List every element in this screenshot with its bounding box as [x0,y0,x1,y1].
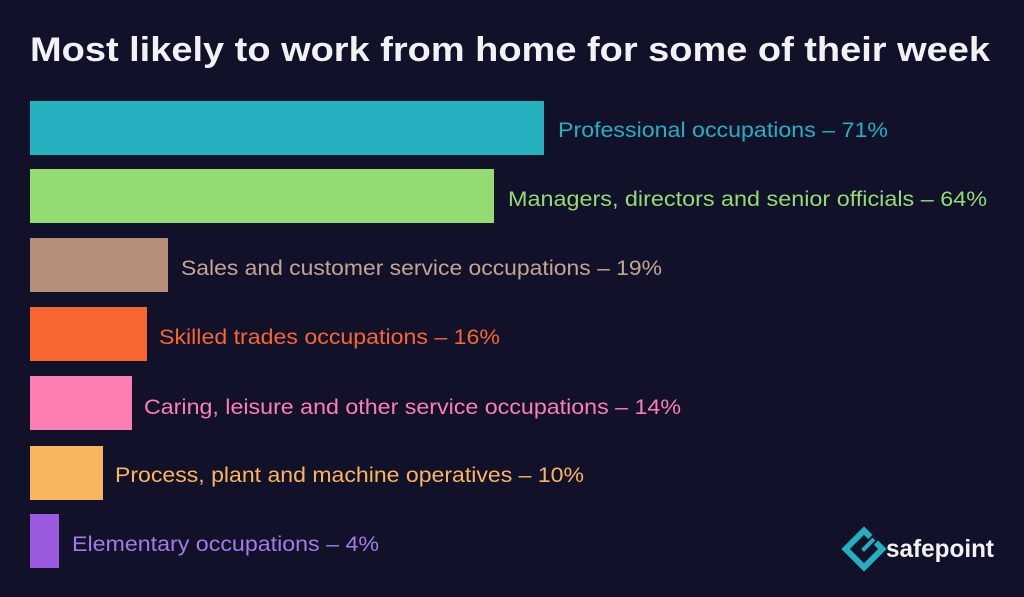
bar: process [30,446,584,500]
icon: diamond [846,528,885,567]
bar: sales [30,238,662,292]
bar: caring [30,376,681,430]
bar: managers [30,169,987,223]
bar: professional [30,101,888,155]
bar: caring: Caring, leisure and other service occupations – 14% [144,396,681,419]
logo: safepoint [886,535,995,563]
bar: elementary [30,514,379,568]
logo [846,528,995,567]
title: Most likely to work from home for some of their week [30,31,990,69]
bar: elementary: Elementary occupations – 4% [72,533,379,556]
bar: skilled trades: Skilled trades occupations – 16% [159,326,500,349]
bar: managers: Managers, directors and senior officials – 64% [508,188,987,211]
bar: process: Process, plant and machine operatives – 10% [115,464,584,487]
bar: sales: Sales and customer service occupations – 19% [181,257,662,280]
bar: skilled trades [30,307,500,361]
bar: professional: Professional occupations – 71% [558,119,888,142]
bar chart [30,101,987,568]
